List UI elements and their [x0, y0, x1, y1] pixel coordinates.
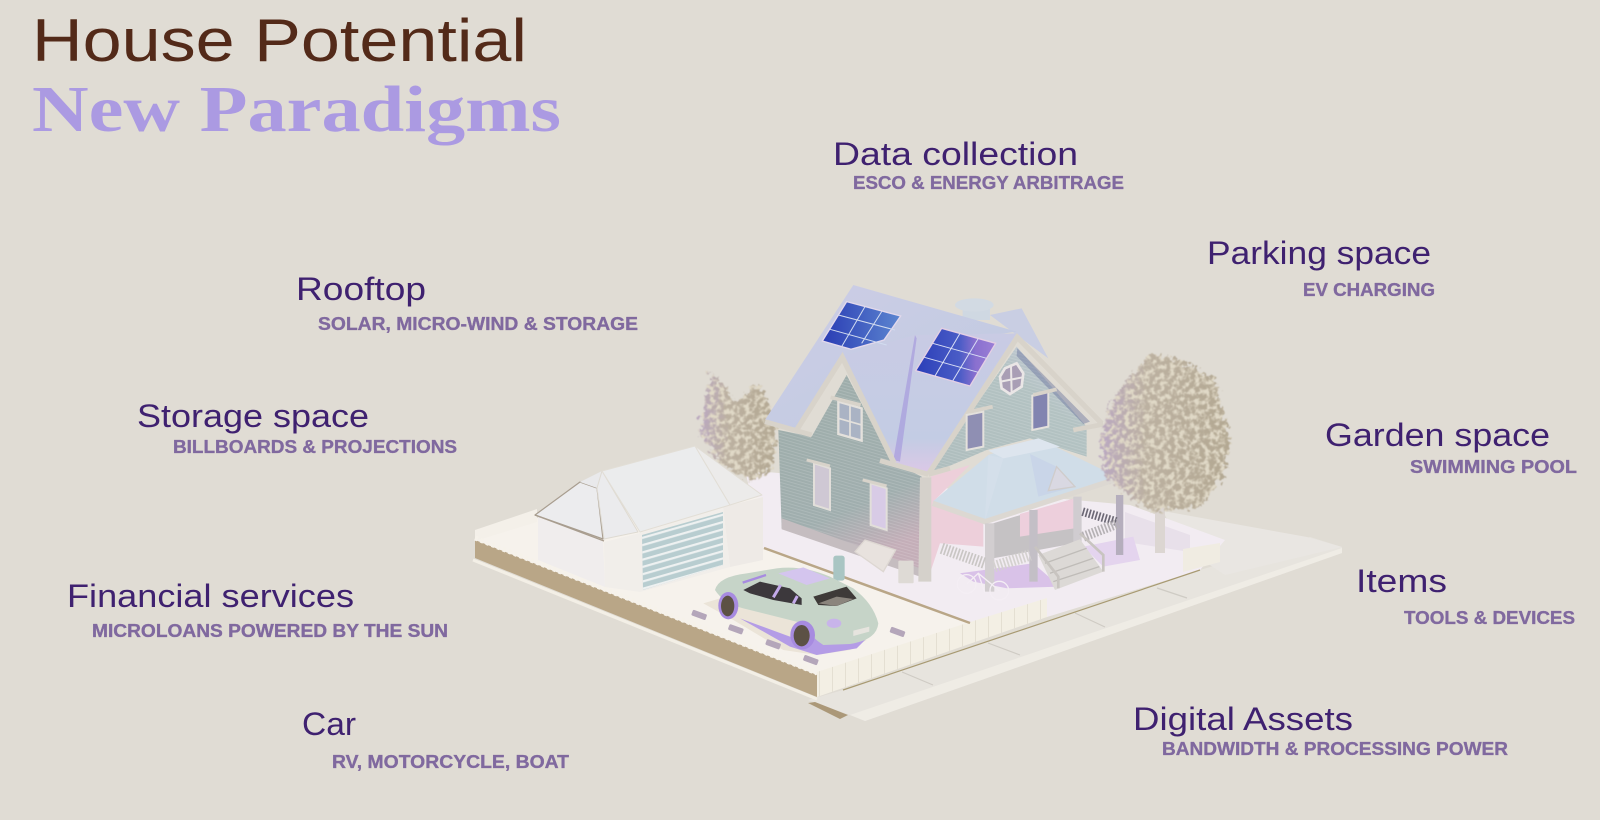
label: Parking space: EV CHARGING	[1303, 279, 1435, 300]
car wheels	[718, 592, 815, 649]
label: Storage space: Storage space	[137, 398, 369, 434]
garage	[535, 446, 763, 592]
label: Data collection: ESCO & ENERGY ARBITRAGE	[853, 172, 1124, 193]
label: Parking space	[1207, 235, 1435, 300]
main house	[765, 285, 1140, 600]
wall lip	[473, 560, 817, 699]
porch steps	[1035, 533, 1103, 590]
yard gate	[1183, 543, 1220, 572]
title line: New Paradigms: New Paradigms	[32, 73, 561, 146]
car windows	[743, 575, 857, 606]
left tree	[699, 372, 778, 482]
porch columns	[985, 495, 1123, 592]
label: Financial services: Financial services	[67, 578, 354, 614]
label: Items	[1356, 563, 1575, 628]
trash bin	[898, 561, 914, 583]
gable windows	[807, 363, 1057, 530]
bicycle	[957, 573, 1009, 600]
porch roof	[933, 438, 1117, 522]
solar panel left	[822, 302, 901, 349]
corner post	[918, 477, 931, 582]
pink wall	[930, 465, 983, 573]
label: Items: TOOLS & DEVICES	[1404, 607, 1575, 628]
curb line	[843, 570, 1200, 690]
label: Financial services: MICROLOANS POWERED BY THE SUN	[92, 620, 448, 641]
front fence	[817, 598, 1047, 697]
driveway ground	[475, 497, 1047, 675]
garage roof	[535, 446, 762, 541]
right tree	[1100, 353, 1230, 553]
right gable wall	[930, 347, 1087, 472]
paved yard	[1163, 511, 1342, 575]
label: Digital Assets: BANDWIDTH & PROCESSING POWER	[1162, 738, 1508, 759]
label: Parking space: Parking space	[1207, 235, 1431, 271]
label: Rooftop	[296, 271, 638, 334]
label: Car: Car	[302, 706, 356, 742]
car tail details	[827, 619, 869, 636]
porch railings	[942, 512, 1118, 567]
label: Digital Assets	[1133, 701, 1508, 759]
solar panel right	[916, 328, 996, 386]
bench	[855, 540, 896, 572]
garage right wall	[723, 497, 763, 567]
central roof slope	[842, 333, 1017, 473]
tree trunk	[1155, 495, 1165, 553]
curb stops	[691, 610, 906, 665]
label: Rooftop: Rooftop	[296, 271, 426, 307]
garage door	[642, 512, 723, 590]
left gable wall	[778, 375, 922, 577]
rear roof	[990, 308, 1048, 358]
label: Garden space	[1325, 417, 1577, 477]
label: Storage space	[137, 398, 457, 457]
label: Financial services	[67, 578, 448, 641]
tree canopy	[1100, 353, 1230, 511]
label: Rooftop: SOLAR, MICRO-WIND & STORAGE	[318, 313, 638, 334]
porch interior	[993, 498, 1075, 558]
title line: House Potential: House Potential	[32, 7, 527, 74]
car	[703, 567, 878, 655]
label: Items: Items	[1356, 563, 1447, 599]
car shadow	[703, 598, 867, 655]
picket tips	[475, 538, 817, 673]
main roof slope	[765, 285, 1017, 428]
back left fence	[475, 509, 537, 541]
back fence	[1125, 512, 1190, 552]
gable trim	[765, 337, 1103, 474]
car roof	[778, 567, 830, 585]
house illustration	[473, 285, 1342, 721]
label: Digital Assets: Digital Assets	[1133, 701, 1353, 737]
driveway edge	[764, 548, 970, 623]
retaining wall	[475, 540, 817, 697]
label: Garden space: SWIMMING POOL	[1410, 456, 1577, 477]
label: Storage space: BILLBOARDS & PROJECTIONS	[173, 436, 457, 457]
label: Data collection	[833, 136, 1124, 193]
EV charger	[833, 556, 845, 581]
house lawn	[745, 470, 1225, 623]
floor highlights	[960, 537, 1140, 588]
plot and sidewalk	[473, 470, 1342, 721]
label: Data collection: Data collection	[833, 136, 1078, 172]
garage front wall	[604, 507, 730, 592]
car body	[715, 568, 878, 645]
chimney	[955, 298, 994, 320]
label: Car: RV, MOTORCYCLE, BOAT	[332, 751, 570, 772]
garage left wall	[538, 517, 605, 587]
label: Car	[302, 706, 570, 772]
sidewalk	[808, 537, 1342, 721]
label: Garden space: Garden space	[1325, 417, 1550, 453]
title	[32, 7, 561, 146]
